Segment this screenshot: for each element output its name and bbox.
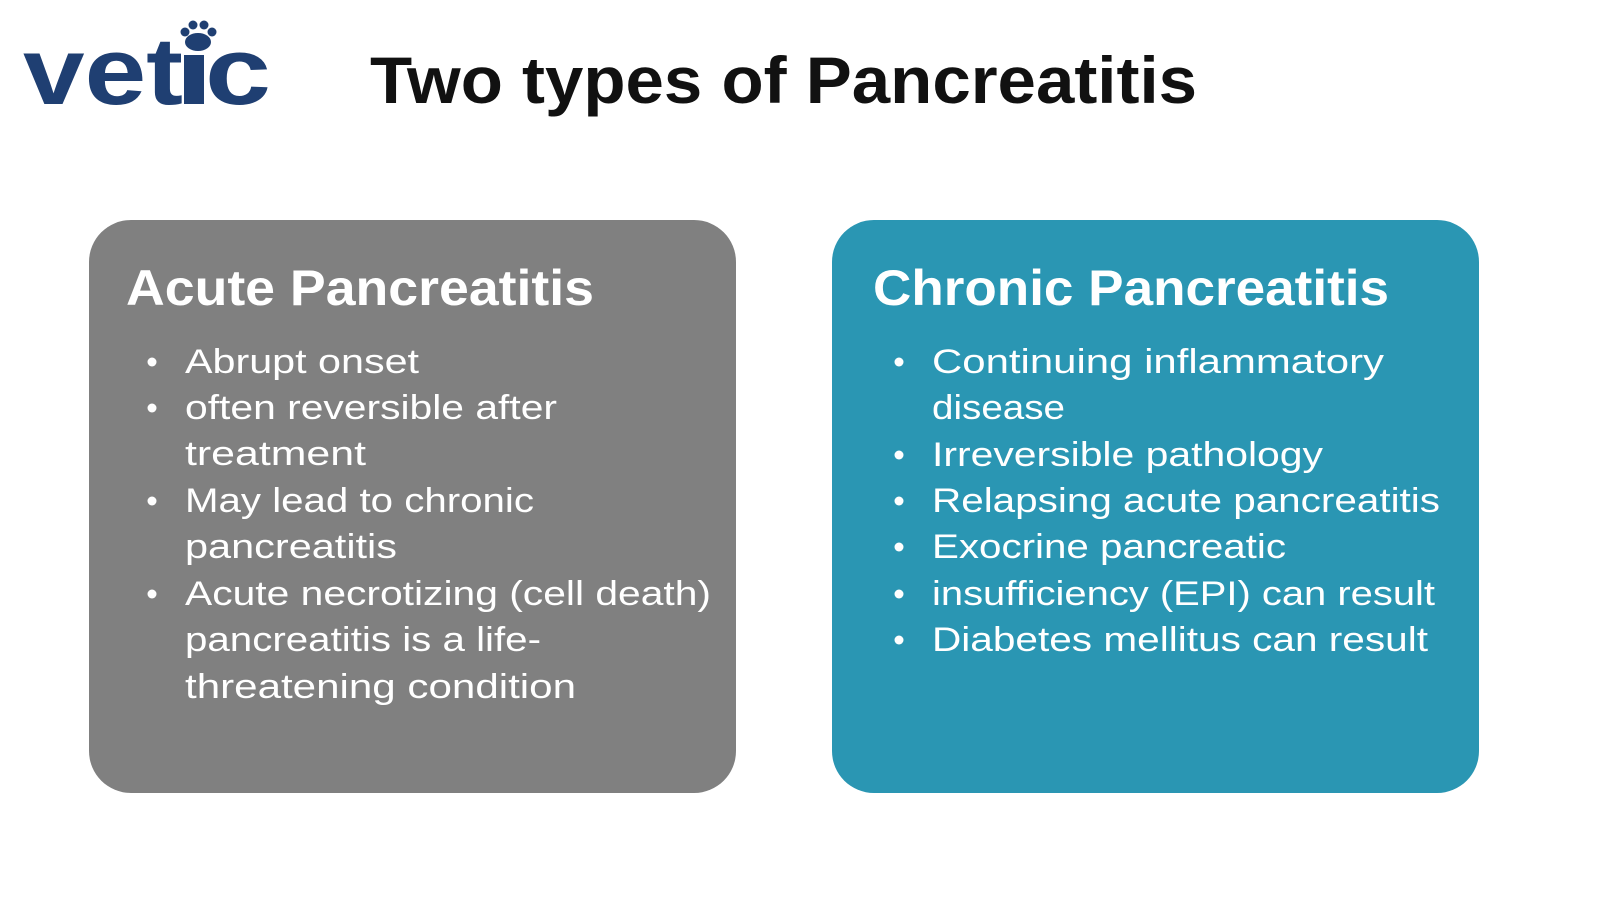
bullet list: acute bbox=[148, 343, 711, 706]
bullet list: acute: treatment bbox=[185, 435, 367, 473]
logo: vet bbox=[23, 18, 183, 125]
heading: acute: Acute Pancreatitis bbox=[126, 260, 594, 316]
bullet list: acute: Abrupt onset bbox=[185, 343, 420, 381]
logo: c bbox=[205, 18, 271, 125]
bullet list: chronic: Continuing inflammatory bbox=[932, 343, 1384, 381]
heading: chronic: Chronic Pancreatitis bbox=[873, 260, 1389, 316]
bullet list: chronic: insufficiency (EPI) can result bbox=[932, 575, 1436, 613]
bullet list: chronic: Irreversible pathology bbox=[932, 436, 1323, 474]
bullet list: acute: Acute necrotizing (cell death) bbox=[185, 575, 711, 613]
bullet list: chronic: Exocrine pancreatic bbox=[932, 528, 1286, 566]
bullet list: acute: threatening condition bbox=[185, 668, 576, 706]
bullet list: chronic: Relapsing acute pancreatitis bbox=[932, 482, 1440, 520]
logo bbox=[23, 18, 271, 125]
panel: acute bbox=[89, 220, 736, 793]
bullet list: chronic bbox=[894, 343, 1440, 659]
bullet list: acute: May lead to chronic bbox=[185, 482, 534, 520]
title: Two types of Pancreatitis bbox=[370, 43, 1197, 117]
bullet list: chronic: disease bbox=[932, 389, 1065, 427]
bullet list: acute: pancreatitis bbox=[185, 528, 397, 566]
panel: chronic bbox=[832, 220, 1479, 793]
icon: paw bbox=[180, 20, 216, 51]
bullet list: acute: pancreatitis is a life- bbox=[185, 621, 541, 659]
bullet list: chronic: Diabetes mellitus can result bbox=[932, 621, 1429, 659]
bullet list: acute: often reversible after bbox=[185, 389, 557, 427]
